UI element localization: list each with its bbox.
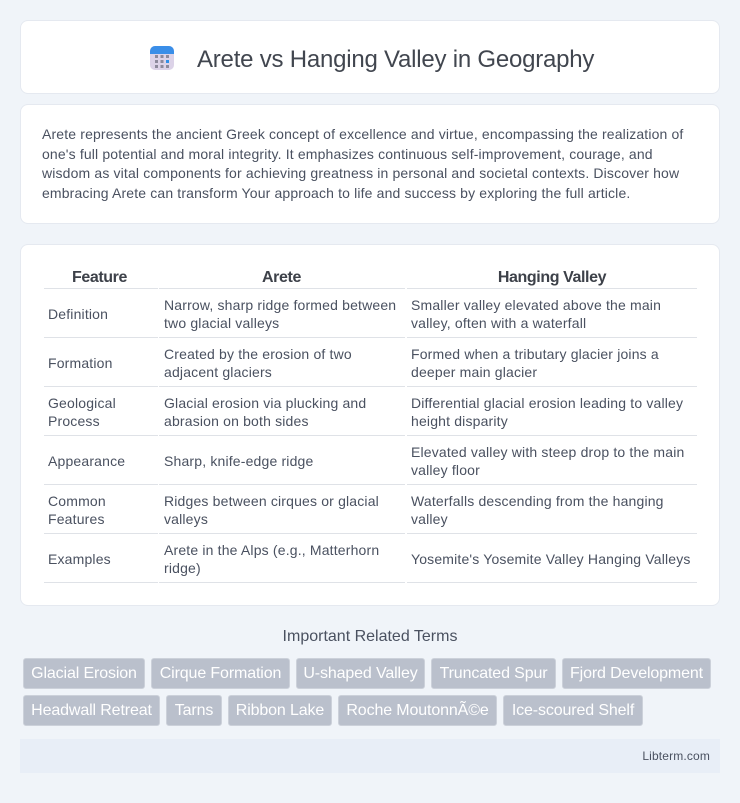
related terms tags: Cirque Formation bbox=[160, 665, 281, 682]
table rows: Created by the erosion of two bbox=[164, 346, 352, 362]
intro text: one's full potential and moral integrity. It emphasizes continuous self-improvement, courage, and bbox=[42, 146, 653, 162]
table rows: Formation bbox=[48, 355, 113, 371]
table rows: abrasion on both sides bbox=[164, 413, 309, 429]
table header bbox=[72, 269, 606, 286]
table rows: Features bbox=[48, 511, 105, 527]
table rows: valleys bbox=[164, 511, 208, 527]
footer source: Libterm.com bbox=[642, 749, 710, 763]
intro card bbox=[20, 104, 720, 224]
table rows: Examples bbox=[48, 551, 111, 567]
table rows: Yosemite's Yosemite Valley Hanging Valleys bbox=[411, 551, 691, 567]
header card bbox=[20, 20, 720, 94]
table rows: Smaller valley elevated above the main bbox=[411, 297, 661, 313]
table rows: two glacial valleys bbox=[164, 315, 279, 331]
table rows: valley floor bbox=[411, 462, 480, 478]
comparison table card bbox=[20, 244, 720, 606]
table header: Hanging Valley bbox=[498, 269, 606, 286]
table rows: valley, often with a waterfall bbox=[411, 315, 586, 331]
related terms tags: Fjord Development bbox=[570, 665, 703, 682]
table rows: Ridges between cirques or glacial bbox=[164, 493, 379, 509]
table rows: Sharp, knife-edge ridge bbox=[164, 453, 313, 469]
table header: Arete bbox=[262, 269, 301, 286]
related terms tags: Glacial Erosion bbox=[31, 665, 137, 682]
table rows bbox=[44, 288, 697, 583]
table rows: Appearance bbox=[48, 453, 125, 469]
related terms tags: Ice-scoured Shelf bbox=[512, 702, 634, 719]
related terms tags bbox=[23, 658, 711, 726]
related terms tags: U-shaped Valley bbox=[303, 665, 418, 682]
related terms heading: Important Related Terms bbox=[283, 628, 457, 645]
related terms tags: Roche MoutonnÃ©e bbox=[346, 702, 489, 719]
table header: Feature bbox=[72, 269, 127, 286]
related terms tags: Headwall Retreat bbox=[31, 702, 152, 719]
intro text: Arete represents the ancient Greek concept of excellence and virtue, encompassing the realization of bbox=[42, 126, 683, 142]
table rows: adjacent glaciers bbox=[164, 364, 272, 380]
table rows: Process bbox=[48, 413, 100, 429]
table rows: Waterfalls descending from the hanging bbox=[411, 493, 664, 509]
table rows: Glacial erosion via plucking and bbox=[164, 395, 366, 411]
table rows: Differential glacial erosion leading to valley bbox=[411, 395, 683, 411]
intro text: wisdom as vital components for achieving greatness in personal and societal contexts. Discover how bbox=[42, 165, 679, 181]
table rows: Arete in the Alps (e.g., Matterhorn bbox=[164, 542, 379, 558]
related terms tags: Tarns bbox=[175, 702, 213, 719]
table rows: valley bbox=[411, 511, 448, 527]
icon: calendar bbox=[150, 46, 174, 70]
related terms tags: Truncated Spur bbox=[440, 665, 547, 682]
table rows: Narrow, sharp ridge formed between bbox=[164, 297, 396, 313]
table rows: ridge) bbox=[164, 560, 201, 576]
intro text: embracing Arete can transform Your approach to life and success by exploring the full article. bbox=[42, 185, 630, 201]
related terms tags: Ribbon Lake bbox=[236, 702, 324, 719]
table rows: height disparity bbox=[411, 413, 508, 429]
intro text bbox=[42, 126, 684, 201]
title: Arete vs Hanging Valley in Geography bbox=[197, 46, 594, 73]
table rows: Definition bbox=[48, 306, 108, 322]
table rows: Common bbox=[48, 493, 106, 509]
footer bbox=[20, 739, 720, 773]
table rows: Formed when a tributary glacier joins a bbox=[411, 346, 659, 362]
table rows: deeper main glacier bbox=[411, 364, 537, 380]
table rows: Geological bbox=[48, 395, 116, 411]
table rows: Elevated valley with steep drop to the main bbox=[411, 444, 684, 460]
